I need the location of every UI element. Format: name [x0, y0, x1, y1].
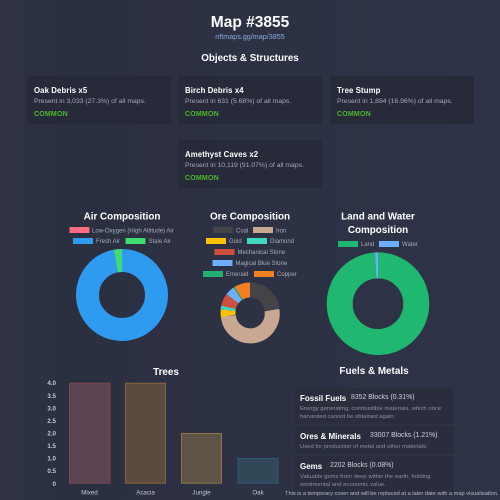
legend: air: Stale Air [148, 239, 171, 245]
bars [70, 383, 278, 483]
panel: land and water [338, 212, 418, 342]
heading: air composition: Air Composition [84, 212, 160, 222]
heading: fuels and metals: Fuels & Metals [339, 366, 409, 376]
panel: air composition [70, 212, 174, 330]
card: oak debris: Present in 3,033 (27.3%) of all maps. [34, 98, 146, 105]
legend: air: Fresh Air [96, 239, 120, 245]
heading: land and water composition: Composition [348, 225, 408, 236]
y axis [47, 380, 57, 488]
x labels [81, 490, 265, 496]
heading: objects and structures: Objects & Structures [201, 53, 299, 64]
x labels: Mixed [81, 490, 98, 496]
legend: land and water [338, 241, 418, 248]
y axis: 3.5 [47, 393, 57, 400]
y axis: 1.5 [47, 443, 57, 450]
legend: land and water: Land [361, 242, 374, 248]
card: tree stump: Present in 1,884 (16.96%) of all maps. [337, 98, 453, 105]
panel: fossil fuels [295, 388, 453, 424]
panel: fossil fuels: harvested cannot be obtained again. [300, 414, 395, 420]
panel: ore composition [203, 212, 297, 336]
legend: ore: Copper [277, 272, 297, 278]
y axis: 2.0 [47, 430, 57, 438]
y axis: 0 [53, 481, 57, 488]
y axis: 1.0 [47, 456, 57, 463]
card: amethyst caves: Present in 10,119 (91.07%) of all maps. [185, 162, 304, 169]
legend: ore: Iron [276, 228, 286, 234]
card: birch debris: Birch Debris x4 [185, 86, 244, 95]
card: amethyst caves: COMMON [185, 175, 219, 182]
legend: ore: Diamond [270, 239, 294, 245]
panel: fossil fuels: Fossil Fuels [300, 394, 346, 402]
panel: fossil fuels: Energy generating, combustible materials, which once [300, 406, 441, 412]
card: birch debris: COMMON [185, 111, 219, 118]
panel: gems [295, 456, 453, 492]
heading: land and water composition: Land and Water [341, 212, 415, 222]
panel: ores and minerals: 33007 Blocks (1.21%) [370, 432, 437, 439]
card: amethyst caves [178, 140, 322, 188]
panel: fossil fuels: 8352 Blocks (0.31%) [351, 394, 415, 401]
donut: air [88, 260, 156, 330]
panel: gems: sentimental and economic value. [300, 482, 386, 488]
y axis: 4.0 [47, 380, 57, 387]
panel: gems: 2202 Blocks (0.08%) [330, 462, 394, 469]
panel: ores and minerals [295, 426, 453, 454]
legend: ore: Magical Blue Stone [236, 261, 288, 267]
title: Map #3855 [211, 14, 289, 31]
legend: ore: Emerald [226, 272, 248, 278]
card: amethyst caves: Amethyst Caves x2 [185, 150, 258, 159]
legend: ore: Coal [236, 228, 248, 234]
legend: land and water: Water [402, 242, 418, 248]
donut: land and water [340, 265, 416, 342]
legend: ore: Gold [229, 239, 242, 245]
heading: ore composition: Ore Composition [210, 212, 290, 222]
y axis: 3.0 [47, 405, 57, 412]
x labels: Jungle [192, 490, 211, 496]
panel: gems: Gems [300, 462, 322, 470]
panel: trees [47, 367, 278, 496]
panel: ores and minerals: Ores & Minerals [300, 432, 361, 440]
legend: ore [203, 227, 297, 278]
y axis: 2.5 [47, 418, 57, 425]
panel: ores and minerals: Used for production of metal and other materials. [300, 444, 428, 450]
legend: air: Low-Oxygen (High Altitude) Air [92, 228, 174, 234]
donut: ore [228, 290, 272, 336]
card: tree stump: Tree Stump [337, 86, 380, 95]
card: oak debris [27, 76, 171, 124]
y axis: 0.5 [47, 468, 57, 475]
legend: ore: Mechanical Stone [238, 250, 286, 256]
x labels: Oak [252, 490, 265, 496]
heading: trees: Trees [153, 367, 179, 378]
footer note: This is a temporary cover and will be replaced at a later date with a map visualisation. [285, 491, 499, 497]
x labels: Acacia [136, 490, 155, 496]
card: oak debris: COMMON [34, 111, 68, 118]
card: oak debris: Oak Debris x5 [34, 86, 87, 95]
card: birch debris: Present in 631 (5.68%) of all maps. [185, 98, 291, 105]
card: tree stump [330, 76, 474, 124]
legend: air [70, 227, 174, 245]
card: birch debris [178, 76, 322, 124]
card: tree stump: COMMON [337, 111, 371, 118]
map link: nftmaps.gg/map/3855 [215, 32, 285, 41]
panel: gems: Valuable gems from deep within the earth, holding [300, 474, 431, 480]
